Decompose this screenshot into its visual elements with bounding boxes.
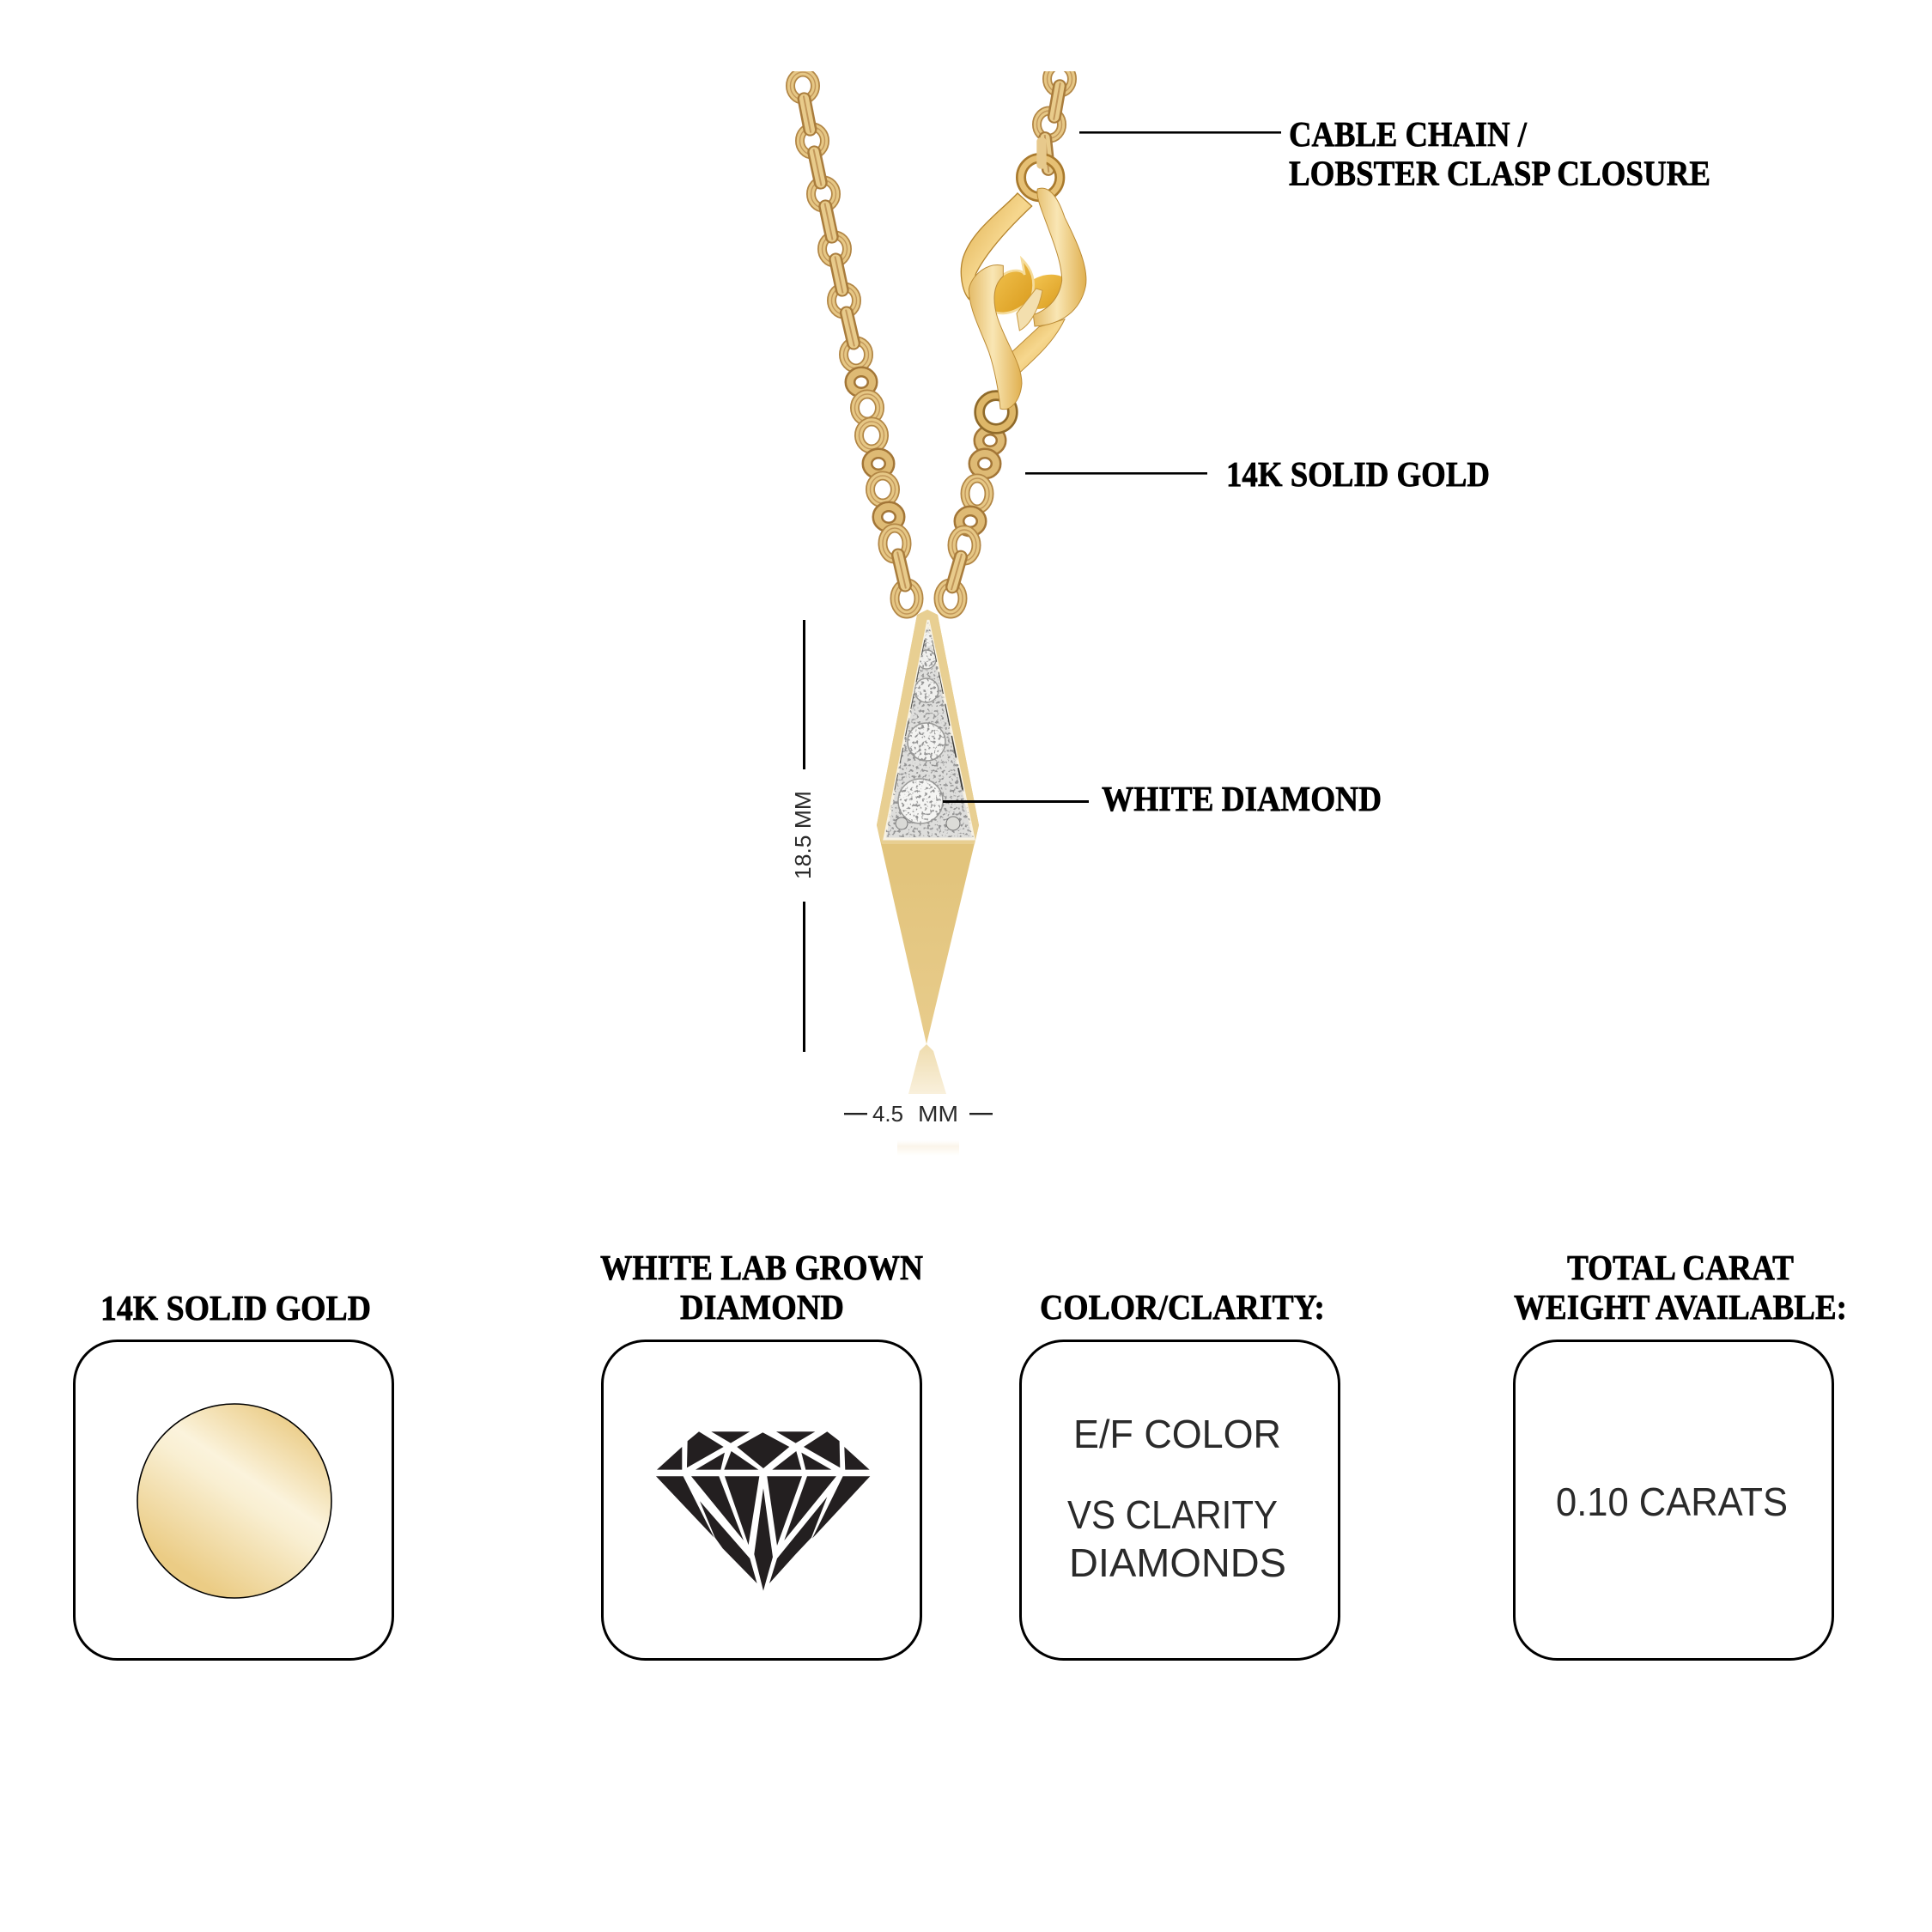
panel: color and clarity	[1020, 1287, 1340, 1659]
heading: 14K solid gold: 14K SOLID GOLD	[100, 1288, 371, 1327]
panel: 14K solid gold	[74, 1288, 393, 1659]
dimension: height 18.5 mm	[790, 620, 816, 1052]
pendant gold body	[877, 610, 979, 1044]
dimension: width 4.5 mm: MM	[918, 1101, 958, 1127]
right chain	[939, 65, 1072, 614]
icon: diamond	[656, 1431, 870, 1591]
text: color and clarity grades: VS CLARITY	[1067, 1492, 1278, 1537]
callout: cable chain / lobster clasp closure: CABLE CHAIN /	[1289, 114, 1528, 154]
necklace product illustration	[790, 65, 1086, 1156]
heading: white lab grown diamond: WHITE LAB GROWN	[600, 1248, 923, 1287]
panel: total carat weight: WEIGHT AVAILABLE:	[1514, 1287, 1847, 1327]
faint lower reflection	[897, 1140, 959, 1156]
pendant upper rim	[877, 610, 979, 844]
pendant reflection	[908, 1044, 946, 1094]
callout: cable chain / lobster clasp closure	[1079, 114, 1710, 192]
clasp	[961, 137, 1086, 428]
panel: white lab grown diamond	[600, 1248, 923, 1659]
diamond pave panel	[884, 620, 974, 839]
text: color and clarity grades	[1067, 1412, 1286, 1585]
text: color and clarity grades: DIAMONDS	[1069, 1540, 1286, 1585]
panel: white lab grown diamond: DIAMOND	[680, 1287, 844, 1327]
heading: color/clarity: COLOR/CLARITY:	[1040, 1287, 1325, 1327]
left chain	[790, 72, 919, 614]
dimension: width 4.5 mm: 4.5	[872, 1101, 903, 1127]
infographic canvas	[73, 71, 1844, 1661]
callout: 14K solid gold: 14K SOLID GOLD	[1226, 454, 1490, 494]
text: carat value: 0.10 CARATS	[1556, 1479, 1788, 1524]
callout: white diamond	[943, 779, 1382, 818]
heading: total carat weight available: TOTAL CARAT	[1567, 1248, 1794, 1287]
panel: total carat weight	[1514, 1248, 1847, 1659]
icon: gold disc	[137, 1404, 331, 1598]
text: color and clarity grades: E/F COLOR	[1073, 1412, 1281, 1456]
dimension: width 4.5 mm	[844, 1101, 993, 1127]
dimension: height 18.5 mm: 18.5 MM	[790, 791, 816, 879]
callout: cable chain / lobster clasp closure: LOBSTER CLASP CLOSURE	[1289, 153, 1710, 192]
callout: white diamond: WHITE DIAMOND	[1102, 779, 1382, 818]
